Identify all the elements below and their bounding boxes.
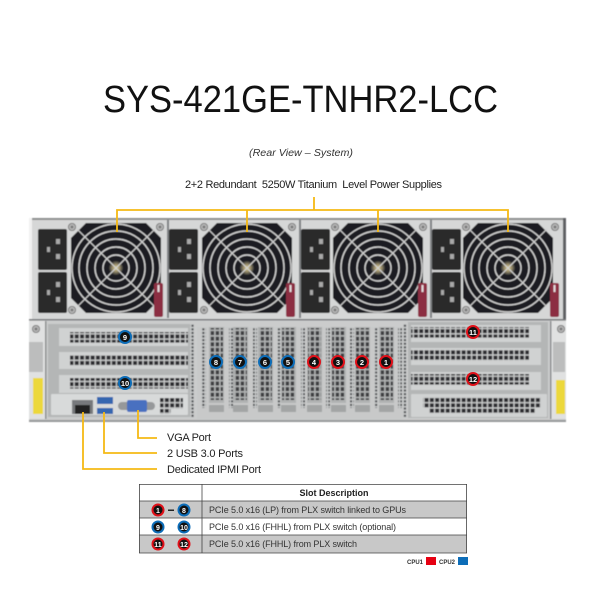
badge 4 (308, 356, 320, 368)
CPU legend: CPU2 (439, 560, 456, 566)
power supply 3 (301, 223, 427, 317)
table header: Slot Description (299, 488, 369, 498)
badge 8 (210, 356, 222, 368)
badge 9: 9 (123, 333, 127, 342)
badge 11: 11 (469, 328, 477, 337)
badge 3: 3 (336, 358, 340, 367)
badge 7: 7 (238, 358, 242, 367)
icon: IPMI RJ45 port (72, 400, 93, 414)
row 2: 10 (180, 525, 188, 532)
badge 11 (467, 326, 479, 338)
slot description table (139, 484, 467, 553)
slot badges on chassis (119, 326, 479, 389)
row 2 (152, 522, 396, 532)
badge 5 (282, 356, 294, 368)
power supplies label: 2+2 Redundant 5250W Titanium Level Power Supplies (185, 179, 442, 191)
power supply 2 (169, 223, 296, 317)
badge 10: 10 (121, 379, 129, 388)
badge 7 (234, 356, 246, 368)
badge 1: 1 (384, 358, 388, 367)
badge 3 (332, 356, 344, 368)
icon: USB 3.0 ports (97, 397, 113, 414)
arrow: VGA callout line (138, 410, 157, 438)
power supply 1 (38, 223, 164, 317)
row 3: 11 (154, 542, 162, 549)
arrow: IPMI callout line (83, 412, 157, 469)
row 3: PCIe 5.0 x16 (FHHL) from PLX switch (209, 539, 357, 549)
row 1: PCIe 5.0 x16 (LP) from PLX switch linked to GPUs (209, 505, 406, 515)
icon: VGA port (118, 400, 155, 412)
bracket: power supply callout lines (117, 197, 508, 232)
label: IPMI port: Dedicated IPMI Port (167, 464, 261, 476)
badge 4: 4 (312, 358, 317, 367)
left expansion slots (59, 328, 188, 393)
warning label left (33, 378, 43, 414)
badge 12: 12 (469, 375, 477, 384)
right expansion slots (411, 325, 547, 417)
center PCIe slots (197, 327, 403, 419)
title: SYS-421GE-TNHR2-LCC (103, 79, 498, 121)
badge 9 (119, 331, 131, 343)
label: VGA Port: VGA Port (167, 432, 211, 444)
power supply 4 (432, 223, 559, 317)
arrow: USB callout line (104, 412, 157, 453)
row 2: 9 (156, 525, 160, 532)
label: USB ports: 2 USB 3.0 Ports (167, 448, 244, 460)
badge 2 (356, 356, 368, 368)
I/O panel (51, 394, 188, 415)
badge 6 (259, 356, 271, 368)
row 1: 1 (156, 508, 160, 515)
badge 8: 8 (214, 358, 218, 367)
row 1: 8 (182, 508, 186, 515)
badge 5: 5 (286, 358, 290, 367)
warning label right (556, 380, 565, 414)
badge 10 (119, 377, 131, 389)
CPU legend (407, 557, 468, 566)
badge 12 (467, 373, 479, 385)
lower chassis (29, 319, 566, 422)
server chassis rear view (29, 218, 566, 422)
badge 2: 2 (360, 358, 364, 367)
row 3: 12 (180, 542, 188, 549)
row 3 (152, 538, 357, 550)
row 2: PCIe 5.0 x16 (FHHL) from PLX switch (optional) (209, 522, 396, 532)
power supply bay (29, 218, 566, 320)
badge 1 (380, 356, 392, 368)
subtitle: rear view: (Rear View – System) (249, 147, 353, 159)
CPU legend: CPU1 (407, 560, 424, 566)
badge 6: 6 (263, 358, 267, 367)
